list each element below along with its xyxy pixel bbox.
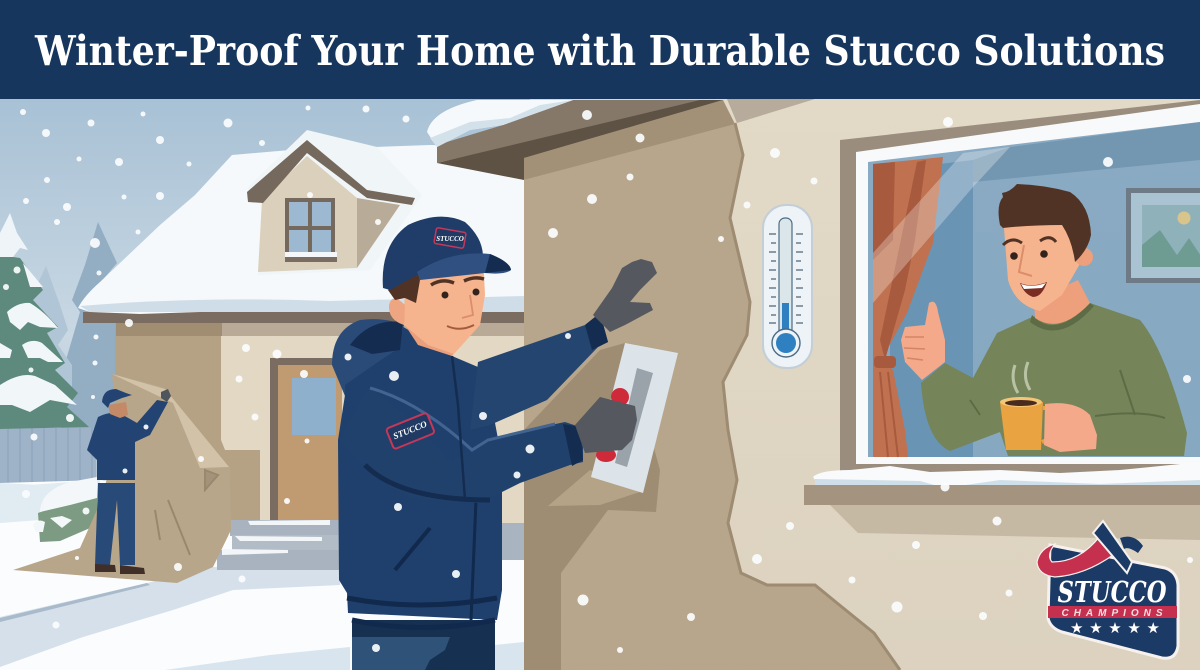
background trees — [30, 222, 118, 440]
worker shadow on stucco — [524, 343, 660, 670]
glass reflection — [873, 147, 1010, 303]
logo band — [1048, 606, 1177, 618]
stucco patch on wall — [524, 123, 900, 670]
dormer snow — [247, 130, 422, 275]
hood — [332, 319, 404, 396]
raised arm — [470, 313, 608, 430]
homeowner — [901, 184, 1187, 456]
lower arm — [340, 388, 583, 503]
head — [1003, 205, 1081, 311]
tarp — [13, 374, 231, 583]
main right wall — [715, 99, 1200, 670]
logo: Stucco Champions — [1037, 521, 1178, 658]
face — [1003, 238, 1056, 245]
upper wall shadow band — [727, 99, 815, 123]
coffee mug — [1000, 397, 1056, 450]
bush — [33, 477, 97, 542]
wall picture — [1126, 188, 1200, 283]
curtain — [873, 157, 943, 457]
pants — [352, 620, 495, 670]
main worker in navy jacket — [332, 217, 678, 670]
window sill with snow — [804, 462, 1200, 540]
hair — [999, 184, 1091, 262]
glove on wall — [593, 259, 657, 332]
driveway — [0, 560, 340, 667]
neck — [403, 322, 465, 356]
fence — [0, 428, 96, 486]
title banner — [0, 0, 1200, 99]
dormer — [247, 130, 422, 275]
small worker covering wall with tarp — [87, 389, 171, 574]
title: Winter-Proof Your Home with Durable Stucco Solutions — [34, 27, 1165, 75]
window — [804, 100, 1200, 540]
thumbs up hand — [901, 302, 945, 380]
logo shield — [1048, 545, 1178, 658]
neck — [1034, 280, 1090, 324]
steam — [1013, 362, 1030, 393]
cap — [383, 217, 511, 290]
zipper — [452, 356, 465, 500]
house wall — [115, 322, 525, 532]
cap: STUCCO — [436, 235, 464, 243]
thermometer — [763, 205, 812, 368]
roof overhang with snow — [427, 100, 735, 180]
room interior — [868, 122, 1200, 457]
jacket body — [332, 321, 502, 620]
window frame — [840, 100, 1200, 480]
sleeve patch: STUCCO — [392, 419, 429, 441]
logo name: STUCCO — [1058, 575, 1167, 609]
logo stars: ★★★★★ — [1070, 619, 1160, 637]
house roof fascia — [83, 312, 525, 323]
house snowy roof — [78, 145, 525, 314]
logo swoosh — [1037, 536, 1113, 577]
logo subtitle: CHAMPIONS — [1062, 608, 1163, 619]
glove on trowel — [575, 397, 637, 453]
large snowy pine tree — [0, 213, 89, 429]
background scene: sky — [0, 99, 530, 529]
door — [270, 358, 342, 520]
sweater — [921, 303, 1187, 456]
ground snow — [0, 480, 530, 670]
sleeve patch — [386, 412, 435, 449]
hand on mug — [1044, 403, 1097, 452]
trowel — [591, 343, 678, 493]
logo trowel — [1093, 521, 1143, 573]
head — [404, 255, 485, 354]
front steps — [217, 490, 525, 570]
